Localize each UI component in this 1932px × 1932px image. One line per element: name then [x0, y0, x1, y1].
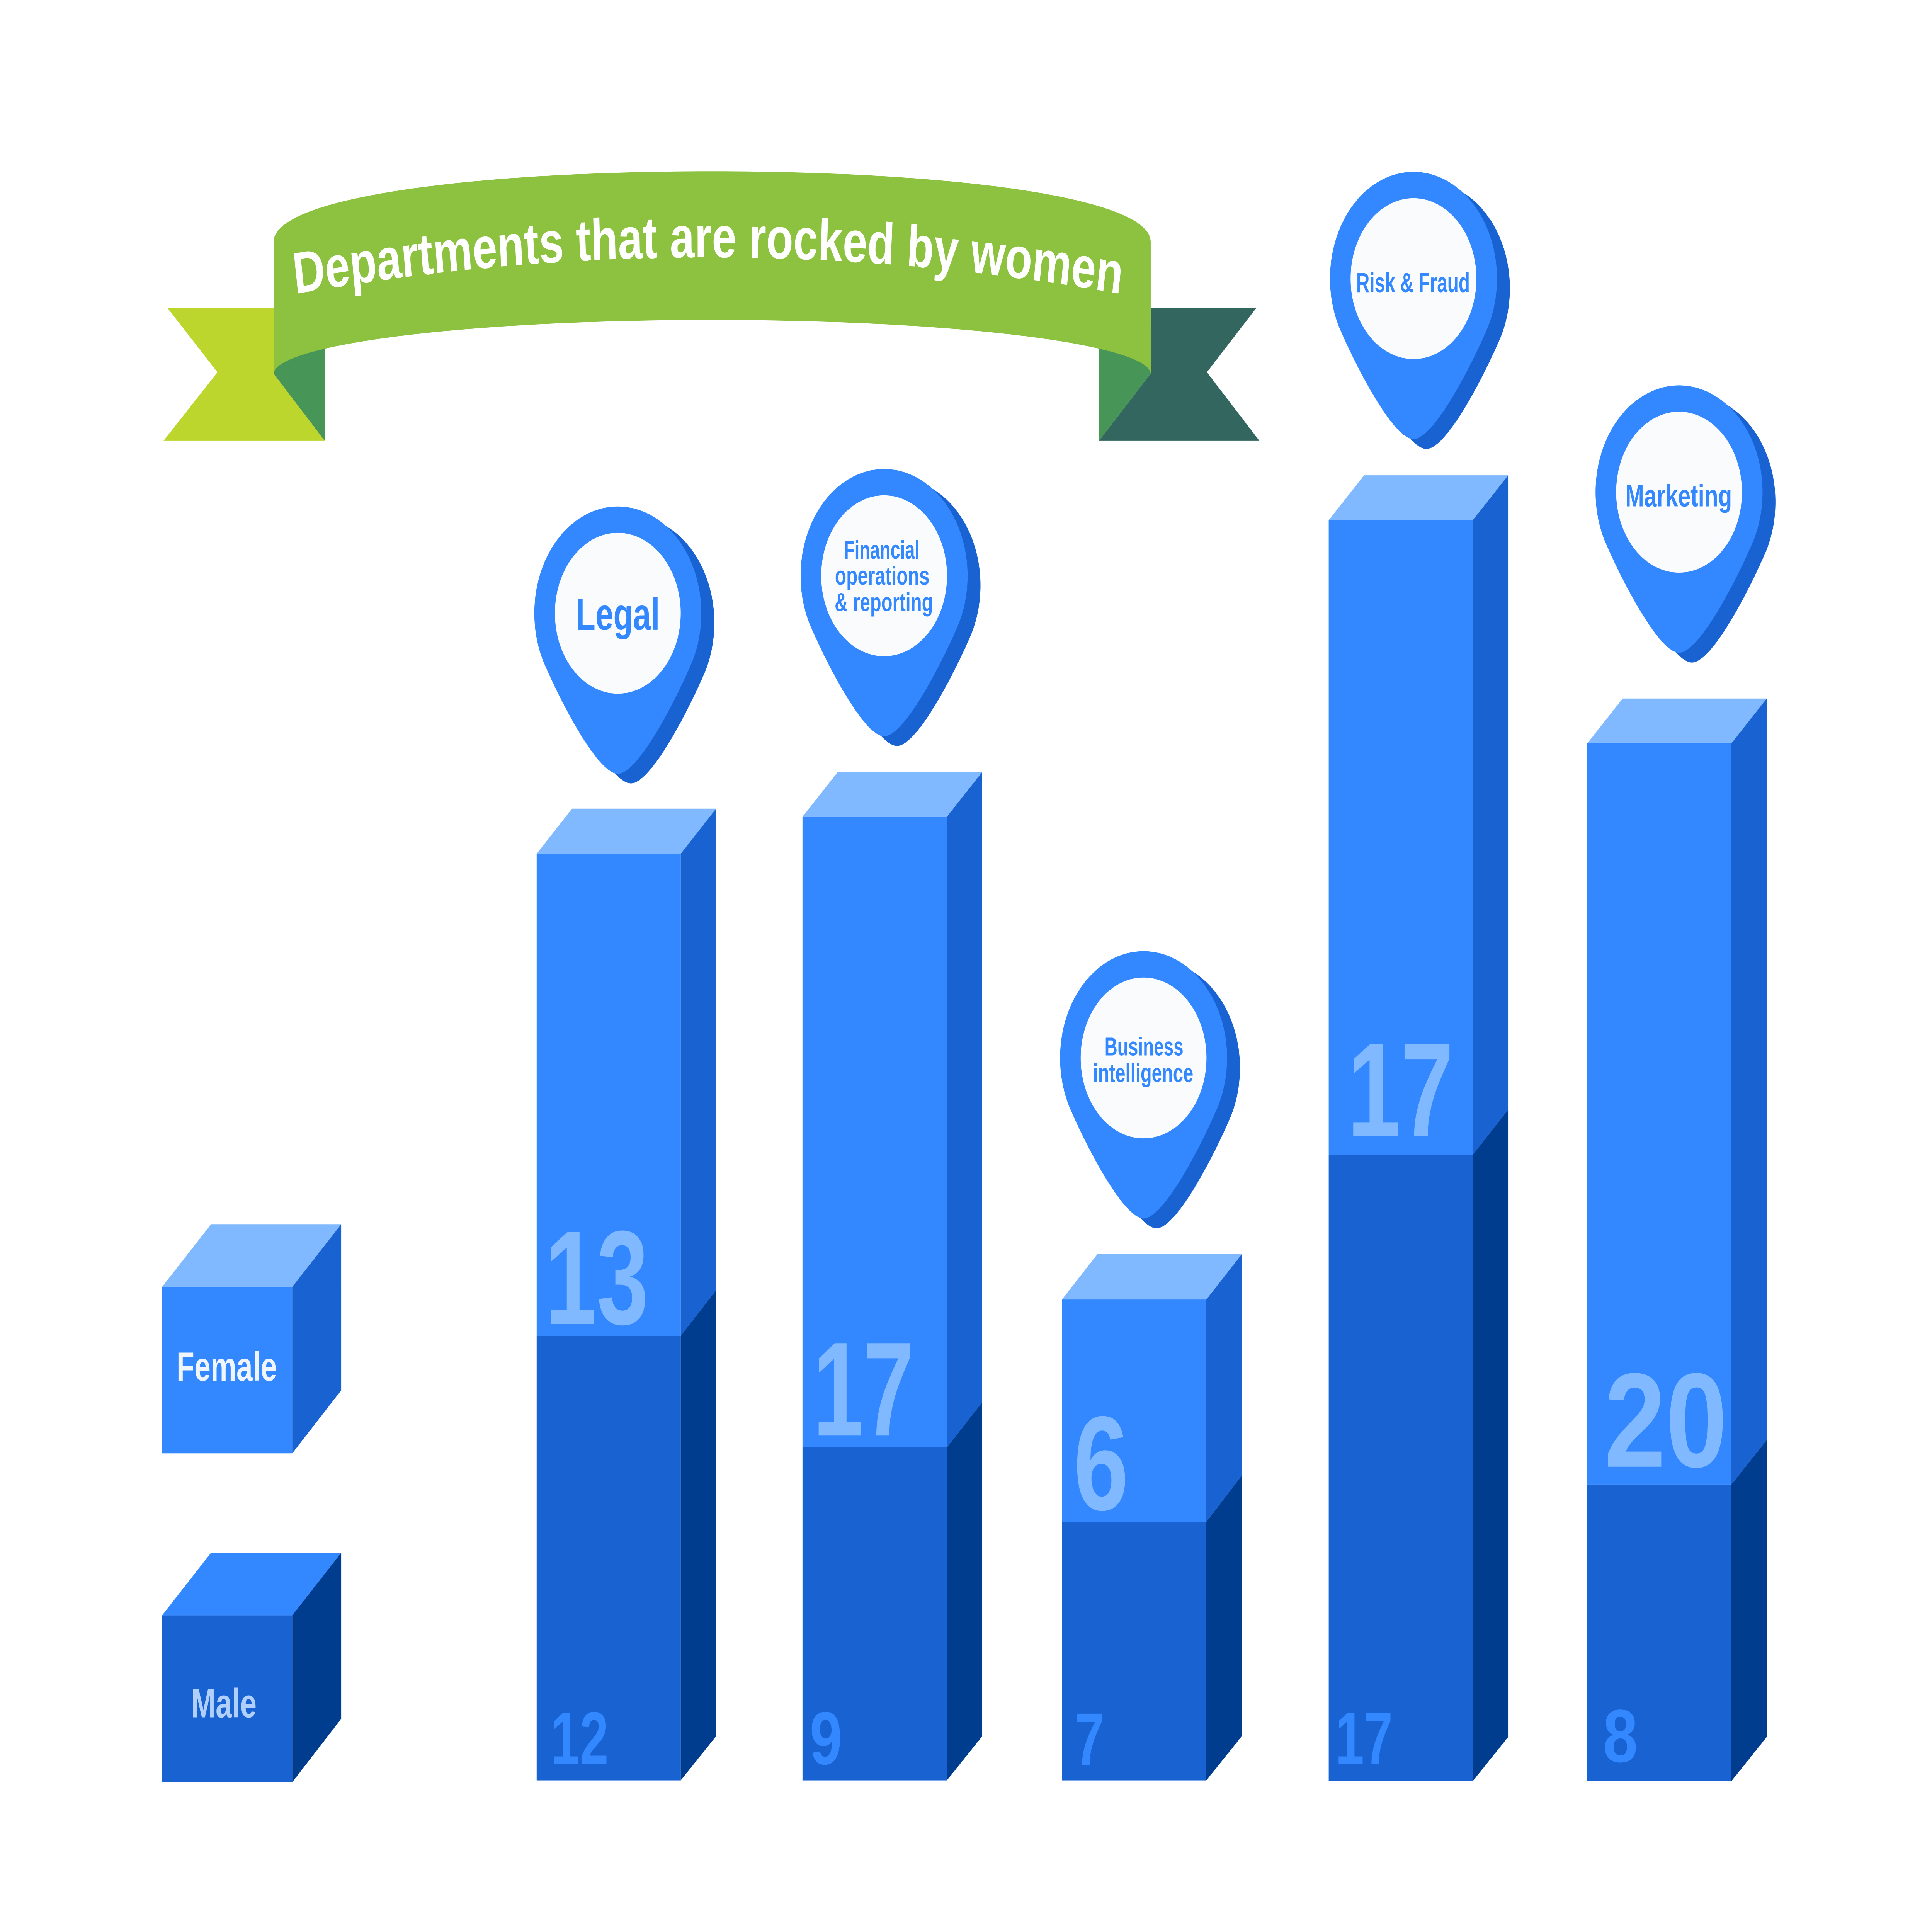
value: male 12: 12: [551, 1696, 609, 1780]
value: male 8: 8: [1603, 1694, 1638, 1778]
pin: Legal: [534, 507, 714, 783]
legend: male: [162, 1553, 341, 1782]
bar: Business intelligence: [1062, 1254, 1242, 1781]
bar: Risk and Fraud: [1329, 475, 1508, 1781]
bar: Legal: [537, 809, 716, 1781]
legend label: Male: Male: [191, 1681, 257, 1726]
value: male 7: 7: [1075, 1697, 1104, 1781]
value: female 13: 13: [545, 1203, 648, 1352]
pin label: Financial operations & reporting: operations: [835, 561, 929, 590]
pin: Business intelligence: [1060, 951, 1240, 1228]
ribbon body: [274, 171, 1151, 374]
ribbon tail: right: [1099, 308, 1259, 441]
pin label: Risk & Fraud: Risk & Fraud: [1356, 267, 1470, 298]
pin label: Financial operations & reporting: & reporting: [835, 587, 933, 617]
legend: female: [162, 1224, 341, 1453]
ribbon fold: right: [1099, 326, 1151, 441]
pin label: Business intelligence: intelligence: [1093, 1058, 1193, 1087]
pin: Financial operations and reporting: [801, 469, 981, 746]
ribbon tail: left: [163, 308, 325, 441]
value: female 17: 17: [813, 1315, 914, 1464]
value: male 9: 9: [810, 1696, 842, 1780]
value: female 20: 20: [1604, 1346, 1727, 1495]
pin label: Financial operations & reporting: [835, 535, 933, 617]
pin: Marketing: [1595, 385, 1776, 663]
value: female 17: 17: [1347, 1015, 1454, 1165]
pin label: Financial operations & reporting: Financial: [844, 535, 920, 564]
legend label: Female: Female: [177, 1344, 277, 1390]
title text: Departments that are rocked by women: [290, 204, 1127, 306]
pin label: Marketing: Marketing: [1625, 479, 1732, 514]
title banner: [163, 171, 1259, 441]
bar: Financial operations: [803, 772, 982, 1781]
value: male 17: 17: [1335, 1696, 1393, 1780]
pin label: Business intelligence: [1093, 1032, 1193, 1087]
pin label: Legal: Legal: [576, 589, 660, 640]
ribbon fold: left: [274, 326, 325, 441]
pin label: Business intelligence: Business: [1105, 1032, 1184, 1061]
bar: Marketing: [1587, 699, 1767, 1781]
pin: Risk and Fraud: [1330, 172, 1510, 449]
value: female 6: 6: [1073, 1389, 1129, 1539]
